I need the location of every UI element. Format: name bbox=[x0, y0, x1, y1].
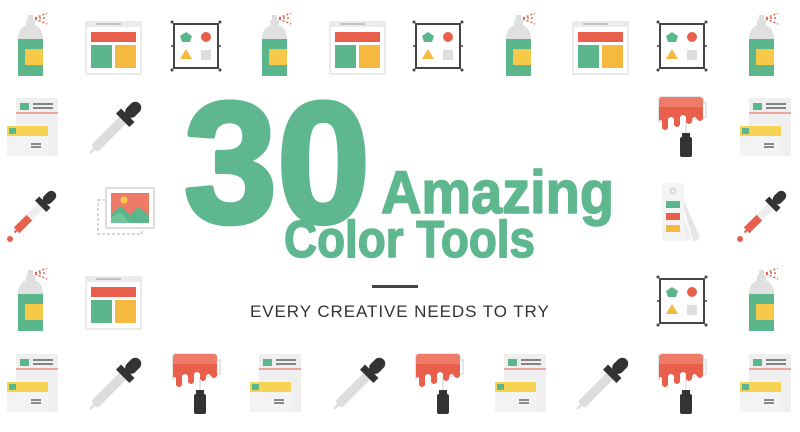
icon: paint roller 1 bbox=[659, 97, 706, 157]
title number 30: 30 bbox=[184, 67, 370, 259]
icon: browser 2 bbox=[329, 21, 386, 75]
icon: spray can 5 bbox=[18, 268, 47, 331]
icon: card 3 bbox=[7, 354, 58, 412]
icon: shapes 1 bbox=[170, 20, 222, 72]
icon: roller 3 bbox=[416, 354, 463, 414]
icon: browser 3 bbox=[572, 21, 629, 75]
icon: spray can 1 bbox=[18, 13, 47, 76]
icon: image bbox=[98, 188, 154, 234]
icon row 1 bbox=[18, 13, 778, 76]
icon row 2 bbox=[7, 97, 791, 160]
icon: card 6 bbox=[740, 354, 791, 412]
icon: dropper 3 bbox=[327, 353, 390, 416]
icon: shapes 2 bbox=[412, 20, 464, 72]
icon: spray can 2 bbox=[262, 13, 291, 76]
icon: red dropper 1 bbox=[7, 187, 60, 242]
icon: browser 4 bbox=[85, 276, 142, 330]
icon: card 5 bbox=[495, 354, 546, 412]
icon: spray can 6 bbox=[749, 268, 778, 331]
icon: swatch fan bbox=[662, 183, 699, 241]
icon: spray can 3 bbox=[506, 13, 535, 76]
icon: dropper 2 bbox=[83, 353, 146, 416]
icon: roller 2 bbox=[173, 354, 220, 414]
icon: spray can 4 bbox=[749, 13, 778, 76]
icon: dropper 4 bbox=[570, 353, 633, 416]
title word Amazing: Amazing bbox=[381, 159, 614, 226]
icon row 5 bbox=[7, 353, 791, 416]
icon: shapes 4 bbox=[656, 276, 708, 326]
subtitle: EVERY CREATIVE NEEDS TO TRY bbox=[250, 302, 550, 321]
icon: card 2 bbox=[740, 98, 791, 156]
title words Color Tools: Color Tools bbox=[284, 211, 535, 269]
icon: browser 1 bbox=[85, 21, 142, 75]
title bbox=[184, 67, 614, 269]
divider line bbox=[372, 285, 418, 288]
icon: roller 4 bbox=[659, 354, 706, 414]
icon row 3 bbox=[7, 183, 790, 242]
icon: card 4 bbox=[250, 354, 301, 412]
icon: red dropper 2 bbox=[737, 187, 790, 242]
icon row 4 bbox=[18, 268, 778, 331]
icon: card 1 bbox=[7, 98, 58, 156]
icon: dropper 1 bbox=[83, 97, 146, 160]
icon: shapes 3 bbox=[656, 20, 708, 72]
